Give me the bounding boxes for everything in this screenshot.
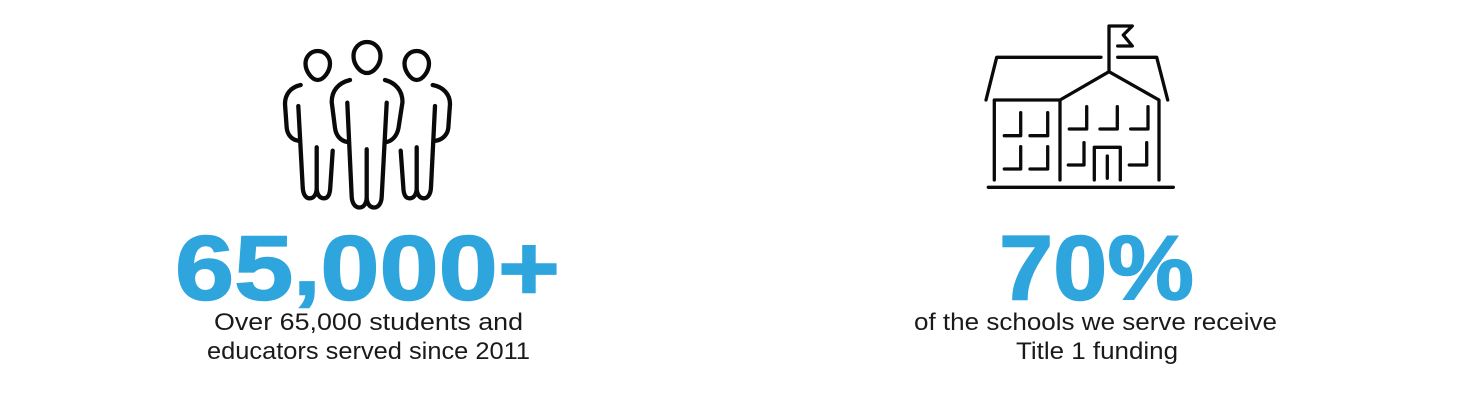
big number: 65,000+: , bbox=[293, 218, 320, 312]
caption: students and educators bbox=[207, 309, 530, 365]
big number: 70%: 70% bbox=[999, 218, 1194, 320]
caption: schools receiving Title 1 funding: of the schools we serve receive bbox=[914, 309, 1277, 336]
panel: students and educators stat bbox=[175, 42, 560, 365]
icon: school building with flag bbox=[986, 26, 1173, 187]
caption: students and educators: educators served since 2011 bbox=[207, 338, 530, 365]
caption: schools receiving Title 1 funding bbox=[914, 309, 1277, 365]
icon: three people bbox=[285, 42, 450, 208]
caption: schools receiving Title 1 funding: Title 1 funding bbox=[1016, 338, 1178, 365]
big number: 65,000+: 000+ bbox=[320, 218, 560, 320]
caption: students and educators: Over 65,000 students and bbox=[214, 309, 523, 336]
big number: 65,000+: 65 bbox=[175, 218, 277, 320]
panel: Title 1 schools stat bbox=[914, 26, 1277, 365]
